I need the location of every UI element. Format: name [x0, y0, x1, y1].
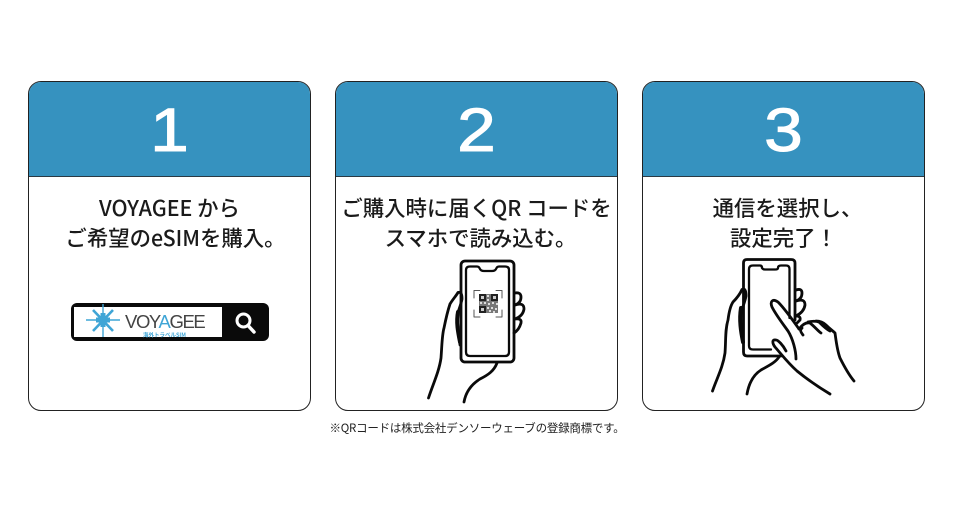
logo subtitle: 海外トラベルSIM	[143, 331, 186, 339]
right hand fingers	[514, 293, 524, 333]
wrist	[464, 363, 497, 402]
left hand	[712, 289, 746, 391]
step 3 number: 3	[764, 96, 803, 164]
QR code	[479, 294, 498, 313]
search bar: VOYAGEE	[71, 303, 269, 341]
step 1 number: 1	[150, 96, 189, 164]
step 2 text	[341, 192, 612, 253]
phone body	[461, 261, 514, 362]
illustration: phone with QR code in hand	[428, 261, 524, 402]
panel: step 2	[335, 81, 618, 411]
step 3 text: 通信を選択し、	[713, 192, 862, 223]
panel: step 3	[642, 81, 925, 411]
phone body	[744, 260, 795, 356]
step 3 text	[713, 192, 862, 253]
step 2 text: ご購入時に届くQR コードを	[341, 192, 612, 223]
icon: star logo	[86, 304, 120, 337]
thumb and palm	[773, 340, 830, 394]
pointing index finger	[771, 300, 799, 359]
step 1 text: ご希望のeSIMを購入。	[65, 222, 286, 253]
logo wordmark: VOYAGEE	[125, 311, 205, 332]
step 2 text: スマホで読み込む。	[385, 222, 576, 253]
footnote: ※QRコードは株式会社デンソーウェーブの登録商標です。	[329, 420, 624, 436]
step 2 number: 2	[457, 96, 496, 164]
illustration: phone tapped by finger	[712, 260, 854, 394]
step 1 text	[65, 192, 286, 253]
step 3 header band	[643, 82, 924, 177]
curled fingers and back of hand	[799, 321, 854, 381]
step 1 text: VOYAGEE から	[99, 192, 240, 223]
icon: magnifier	[237, 314, 254, 332]
wrist	[747, 357, 779, 394]
step 3 text: 設定完了！	[730, 222, 837, 253]
step 1 header band	[29, 82, 310, 177]
back fingers	[796, 289, 805, 323]
QR corner brackets	[474, 290, 502, 317]
step 2 header band	[336, 82, 617, 177]
panel: step 1	[28, 81, 311, 411]
left hand	[428, 292, 462, 398]
